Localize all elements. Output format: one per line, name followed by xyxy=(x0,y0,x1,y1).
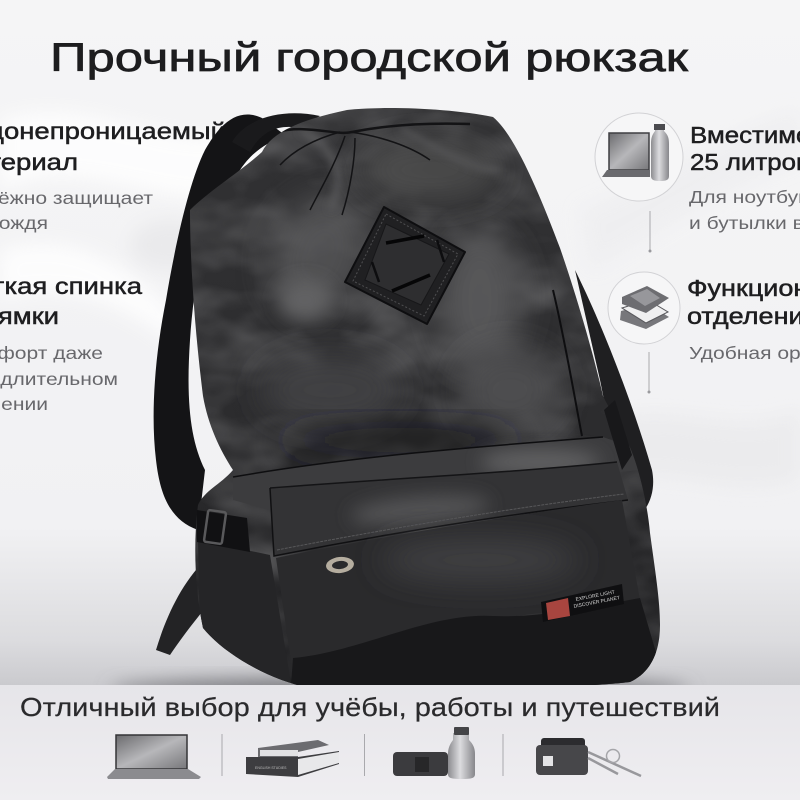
backpack photo illustration xyxy=(154,100,670,700)
feature: soft back and straps xyxy=(0,274,143,415)
zipper ring pull xyxy=(325,556,355,574)
right side strap tab xyxy=(604,400,632,470)
bottom base xyxy=(291,598,656,685)
side compression strap with buckle xyxy=(197,510,250,552)
connector line 1 xyxy=(648,211,652,252)
drawstring gathers xyxy=(275,124,470,215)
side seam xyxy=(553,290,582,436)
top handle loop xyxy=(232,113,320,152)
lower pocket xyxy=(276,500,640,668)
feature: compartments xyxy=(608,272,800,394)
right strap xyxy=(575,270,653,522)
front belt band xyxy=(234,437,637,502)
icon: laptop xyxy=(107,735,201,779)
bottom heading: Отличный выбор для учёбы, работы и путешествий xyxy=(20,692,720,722)
fabric highlights xyxy=(254,128,560,454)
bottom panel xyxy=(0,685,800,800)
icon: books xyxy=(608,272,680,344)
diamond logo patch xyxy=(345,207,465,324)
brand label: DISCOVER PLANET xyxy=(573,595,620,610)
icon: pouch xyxy=(393,752,448,776)
description: rain protection xyxy=(0,188,153,234)
heading: soft back xyxy=(0,274,143,330)
brand label: EXPLORE LIGHT xyxy=(575,589,615,603)
title: Прочный городской рюкзак xyxy=(50,36,689,80)
lower left strap xyxy=(156,560,212,655)
left shoulder strap xyxy=(154,115,285,530)
heading: capacity xyxy=(690,123,800,176)
description: comfort xyxy=(0,343,118,415)
icon: books xyxy=(246,740,339,777)
heading: waterproof material xyxy=(0,119,226,176)
icon: laptop and bottle xyxy=(595,113,683,201)
icon: books: ENGLISH STUDIES xyxy=(255,766,287,770)
icon: key pouch with keys xyxy=(536,738,641,776)
bag body xyxy=(180,100,670,700)
feature: waterproof material xyxy=(0,119,226,234)
brand label xyxy=(541,584,624,622)
front pocket flap xyxy=(270,462,628,556)
feature: capacity xyxy=(595,113,800,252)
icon: bottle xyxy=(448,727,475,779)
dividers xyxy=(222,734,503,776)
side pocket xyxy=(198,540,292,690)
description: capacity xyxy=(689,187,800,234)
connector line 2 xyxy=(648,352,650,394)
heading: compartments xyxy=(687,276,800,330)
fabric mottling xyxy=(180,100,670,700)
